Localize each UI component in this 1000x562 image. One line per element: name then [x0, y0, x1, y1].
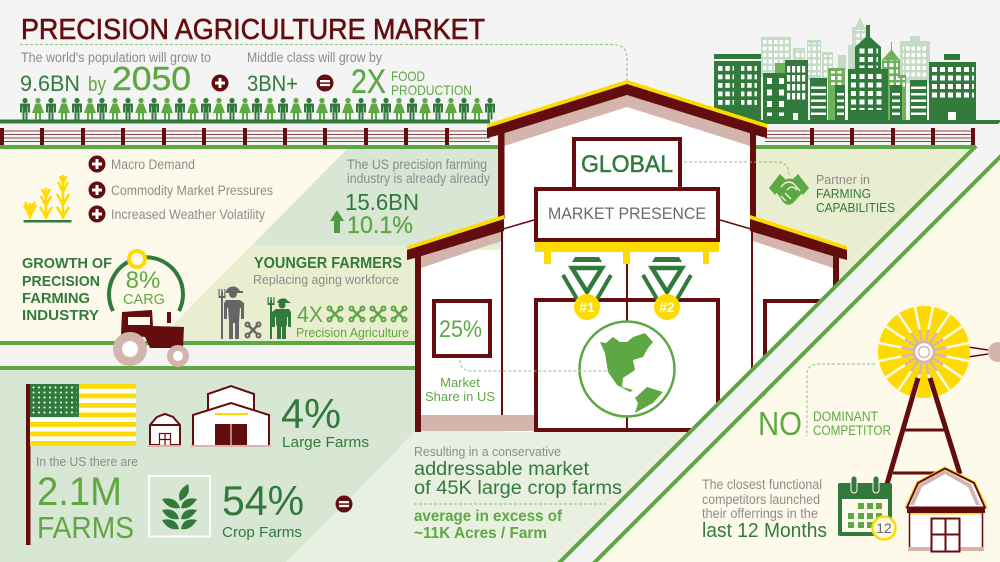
right wing underside: [753, 230, 833, 268]
growth gauge: [109, 251, 183, 311]
right wing yellow edge: [750, 215, 847, 250]
competitors text: [702, 477, 827, 542]
population text: The world's population will grow to: [21, 50, 211, 65]
icon: equals: [336, 496, 352, 512]
population number: [20, 60, 191, 97]
cover for top right: [978, 127, 1000, 152]
left wing yellow edge: [407, 215, 504, 250]
main roof underside: [504, 95, 750, 146]
macro demand item: Macro Demand: [111, 157, 195, 172]
market share box: 25%: [439, 316, 482, 343]
population number: 2050: [112, 60, 191, 97]
medal 1: #1: [579, 299, 595, 315]
growth heading: FARMING: [22, 290, 90, 307]
road: [555, 122, 1000, 562]
weather item: Increased Weather Volatility: [111, 207, 265, 222]
competitors text: last 12 Months: [702, 520, 827, 542]
54 percent: Crop Farms: [222, 524, 302, 541]
growth heading: INDUSTRY: [22, 307, 99, 324]
macro demand item: [88, 156, 195, 172]
globe: [580, 322, 674, 416]
4X precision agriculture: 4X: [297, 302, 323, 327]
fence: [0, 128, 975, 145]
global sign: [574, 139, 680, 189]
food production: [351, 63, 472, 101]
row of people: [20, 98, 495, 120]
commodity item: Commodity Market Pressures: [111, 183, 273, 198]
barn base: [421, 415, 535, 431]
competitors text: their offerrings in the: [702, 506, 818, 521]
green ground bands: [0, 120, 1000, 370]
growth heading: [22, 255, 112, 324]
partner text: [816, 172, 895, 215]
icon: grey drone: [246, 322, 260, 338]
younger farmers heading: YOUNGER FARMERS: [254, 255, 402, 272]
market share label: Market: [440, 375, 480, 390]
icon: large barn: [191, 386, 271, 447]
blades: [878, 306, 970, 398]
icon: corn: [24, 175, 71, 222]
tail: [968, 342, 1000, 362]
global sign: GLOBAL: [581, 151, 673, 178]
main roof yellow edge: [487, 80, 767, 128]
dashed market share connector: [460, 360, 610, 371]
addressable market text: average in excess of: [414, 508, 563, 525]
yellow beam: [535, 242, 719, 264]
main barn body: [504, 97, 750, 432]
US farming figures: [330, 189, 419, 239]
4 percent: [281, 390, 369, 451]
partner text: CAPABILITIES: [816, 200, 895, 215]
food production: PRODUCTION: [391, 82, 472, 98]
market presence sign: [536, 189, 718, 240]
growth heading: GROWTH OF: [22, 255, 112, 272]
addressable market text: of 45K large crop farms: [414, 478, 622, 499]
icon: american flag: [26, 384, 136, 545]
US farms text: In the US there are: [36, 454, 138, 469]
windmill: [878, 306, 1000, 484]
growth heading: PRECISION: [22, 273, 100, 290]
54 percent: 54%: [222, 477, 304, 524]
addressable market text: addressable market: [414, 459, 590, 480]
barn doors: [536, 300, 718, 430]
panel: partner: [700, 149, 972, 421]
US farming figures: 15.6BN: [345, 189, 419, 215]
2.1M farms: FARMS: [37, 510, 134, 545]
market presence sign: MARKET PRESENCE: [548, 204, 706, 223]
medal 2: #2: [659, 299, 675, 315]
addressable market text: ~11K Acres / Farm: [414, 525, 547, 542]
market share label: Share in US: [425, 389, 495, 404]
partner text: Partner in: [816, 172, 870, 187]
barn: [407, 80, 847, 432]
door centre line: [626, 262, 628, 432]
left wing wall: [421, 250, 504, 420]
younger farmers subtext: Replacing aging workforce: [253, 272, 399, 287]
panel: competition: [598, 160, 1000, 562]
middle class number: 3BN+: [247, 71, 298, 96]
main posts: [498, 131, 756, 415]
medal 2: [643, 257, 691, 320]
icon: older farmer: [218, 287, 244, 339]
icon: tractor: [118, 310, 186, 364]
icon: calendar: 12: [876, 520, 892, 536]
4X precision agriculture: [296, 302, 409, 340]
icon: plus: [212, 74, 228, 92]
middle class text: Middle class will grow by: [247, 50, 382, 65]
right wing roof: [750, 218, 847, 260]
4X precision agriculture: Precision Agriculture: [296, 326, 409, 340]
right wing window: [765, 301, 840, 420]
icon: handshake: [769, 174, 809, 205]
no dominant competitor: COMPETITOR: [813, 423, 891, 438]
competitors text: The closest functional: [702, 477, 822, 492]
no dominant competitor: [758, 405, 891, 442]
addressable market text: [414, 444, 622, 542]
food production: FOOD: [391, 68, 425, 84]
market share label: [425, 375, 495, 404]
no dominant competitor: NO: [758, 405, 802, 442]
right wing wall: [750, 225, 833, 420]
2.1M farms: 2.1M: [37, 470, 122, 514]
no dominant competitor: DOMINANT: [813, 409, 878, 424]
icon: calendar: [838, 476, 896, 540]
partner text: FARMING: [816, 186, 871, 201]
food production: 2X: [351, 63, 386, 101]
panel: macro drivers: [0, 149, 500, 341]
competitors text: competitors launched: [702, 492, 820, 507]
title: PRECISION AGRICULTURE MARKET: [21, 14, 485, 46]
city skyline: [714, 17, 976, 121]
2.1M farms: [37, 470, 134, 545]
growth gauge: CARG: [123, 292, 165, 308]
population number: by: [88, 74, 106, 96]
wing posts: [415, 256, 839, 432]
market share box: [434, 301, 490, 356]
US farming text: industry is already already: [347, 171, 490, 186]
medal 1: [563, 257, 611, 320]
4 percent: 4%: [281, 390, 341, 437]
dashed global connector: [684, 162, 789, 175]
US farming figures: 10.1%: [347, 212, 413, 239]
US farming text: The US precision farming: [347, 157, 487, 172]
panel: younger farmers: [157, 245, 500, 341]
US farming text: [347, 157, 490, 186]
panel: US farms: [0, 369, 500, 562]
growth gauge: 8%: [126, 267, 160, 294]
panel: addressable market: [286, 430, 700, 562]
addressable market text: Resulting in a conservative: [414, 444, 561, 459]
icon: wheat: [149, 476, 210, 536]
main roof: [487, 82, 767, 138]
left wing roof: [407, 218, 504, 260]
icon: equals: [316, 74, 334, 92]
beam lines: [503, 220, 751, 229]
left wing underside: [421, 230, 501, 268]
4 percent: Large Farms: [282, 434, 369, 451]
panel: US precision farming: [252, 149, 500, 245]
icon: farmhouse: [905, 467, 987, 552]
dashed no-competitor connector: [807, 364, 875, 436]
population number: 9.6BN: [20, 71, 80, 96]
tower: [887, 378, 960, 484]
dashed connector from title to barn: [20, 44, 627, 80]
icon: younger farmer: [268, 297, 291, 339]
icon: small barn: [148, 414, 181, 447]
